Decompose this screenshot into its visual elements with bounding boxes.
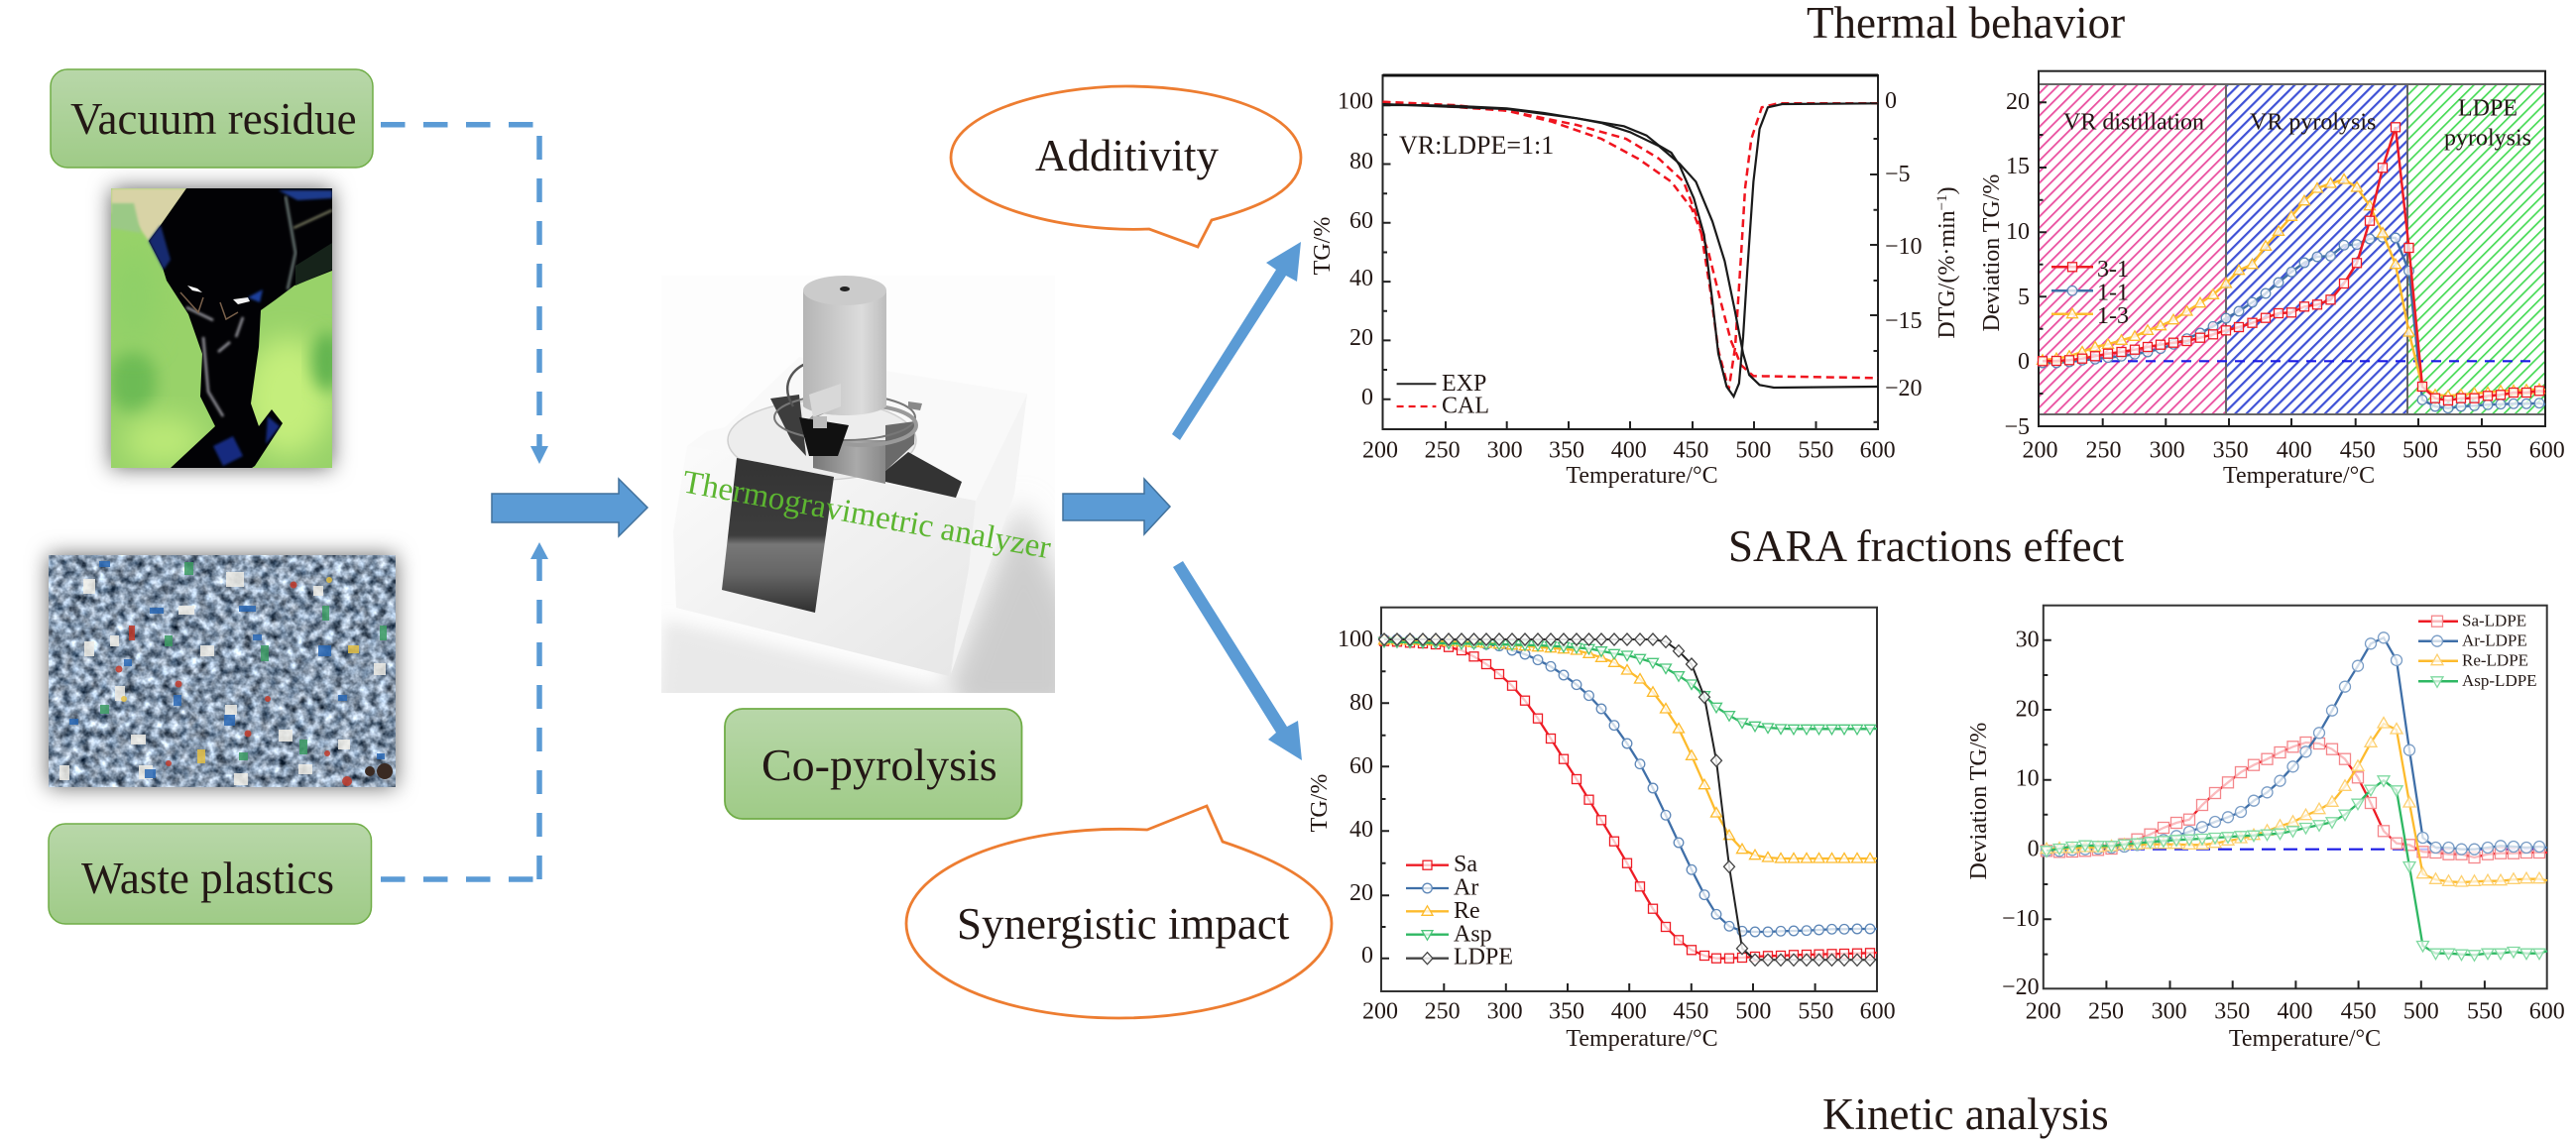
box: vacuum residue (51, 69, 373, 168)
x tick labels: 600 (2529, 438, 2565, 464)
x tick labels: 400 (2277, 999, 2312, 1025)
x tick labels: 550 (2466, 438, 2502, 464)
curve: Ar-LDPE (2047, 637, 2547, 851)
y tick labels: −20 (2002, 974, 2040, 1000)
legend: SARA fractions: LDPE (1454, 945, 1513, 971)
y tick labels: TG: 20 (1349, 325, 1373, 351)
curve: 1-3 (2043, 179, 2545, 396)
y tick labels: 0 (2018, 349, 2030, 375)
y tick labels: −10 (2002, 906, 2040, 932)
band: LDPE pyrolysis (2407, 84, 2545, 414)
y axis title: DTG: ) (1934, 186, 1960, 194)
x tick labels: 250 (2088, 999, 2124, 1025)
heading: SARA fractions effect: SARA fractions effect (1728, 521, 2125, 571)
x tick labels: 450 (2340, 438, 2376, 464)
x tick labels: 300 (2152, 999, 2187, 1025)
curve: Re (1384, 640, 1877, 858)
y tick labels: TG: 80 (1349, 149, 1373, 174)
box: waste plastics (49, 824, 371, 924)
curve: calculated DTG (1382, 102, 1878, 390)
y tick labels: 15 (2006, 154, 2030, 179)
x tick labels (1362, 999, 1896, 1025)
legend: EXP and CAL (1397, 371, 1489, 419)
y tick labels: 40 (1349, 817, 1373, 843)
y tick labels (1338, 627, 1373, 969)
legend: fraction blends: Ar-LDPE (2462, 631, 2527, 650)
legend: fraction blends (2418, 612, 2537, 690)
curve: Re-LDPE (2047, 724, 2547, 882)
label: thermogravimetric analyzer: Thermogravimetric analyzer (680, 464, 1054, 566)
y axis title: DTG: −1 (1934, 194, 1950, 210)
curve: LDPE (1384, 639, 1877, 960)
x tick labels: 250 (2086, 438, 2122, 464)
x tick labels: 400 (1611, 438, 1647, 464)
x axis title: Temperature/°C (1566, 1026, 1718, 1052)
photo: vacuum residue poured (109, 188, 343, 468)
y axis title: TG: TG/% (1310, 217, 1336, 275)
curve: Sa-LDPE (2047, 743, 2547, 857)
y tick labels: DTG: −15 (1885, 308, 1923, 334)
curve: 1-1 (2043, 237, 2545, 408)
x tick labels: 200 (2023, 438, 2058, 464)
y tick labels: TG: 0 (1361, 385, 1373, 410)
box: vacuum residue: Vacuum residue (70, 94, 357, 144)
band: VR distillation (2039, 84, 2226, 414)
y tick labels: 60 (1349, 753, 1373, 779)
y tick labels: DTG: −5 (1885, 162, 1911, 187)
x tick labels: 250 (1425, 999, 1461, 1025)
box: co-pyrolysis: Co-pyrolysis (761, 740, 997, 790)
legend: SARA fractions: Ar (1454, 875, 1478, 901)
callout: synergistic impact (906, 806, 1332, 1018)
x tick labels: 300 (1487, 999, 1523, 1025)
x tick labels: 300 (2150, 438, 2185, 464)
x tick labels: 400 (1611, 999, 1647, 1025)
chart: TG of SARA fractions and LDPE (1307, 608, 1896, 1052)
x tick labels: 550 (1798, 438, 1833, 464)
x tick labels: 600 (1860, 999, 1896, 1025)
x axis title: Temperature/°C (2229, 1026, 2381, 1052)
box: co-pyrolysis (725, 709, 1021, 819)
x tick labels: 350 (1549, 999, 1584, 1025)
arrow: analyzer to results (1063, 479, 1170, 534)
curve: Sa (1384, 641, 1877, 959)
x tick labels: 550 (1798, 999, 1833, 1025)
x axis title: Temperature/°C (2223, 463, 2375, 489)
x tick labels: 600 (1860, 438, 1896, 464)
y tick labels (2004, 89, 2030, 440)
curve: Ar (1384, 639, 1877, 932)
y axis title: Deviation TG/% (1966, 723, 1992, 879)
legend: blend ratios: 1-1 (2097, 281, 2129, 306)
y tick labels (2002, 628, 2040, 1000)
legend: SARA fractions (1406, 852, 1513, 971)
y tick labels: 10 (2006, 219, 2030, 245)
y tick labels: DTG (1885, 88, 1923, 401)
curve: Asp (1384, 641, 1877, 729)
legend: blend ratios: 1-3 (2097, 303, 2129, 329)
x tick labels: 600 (2529, 999, 2565, 1025)
dashed arrow: vacuum residue to feed (381, 125, 548, 464)
x tick labels: 200 (1362, 999, 1398, 1025)
legend: blend ratios: 3-1 (2097, 257, 2129, 283)
x tick labels: 500 (2402, 438, 2438, 464)
ratio annotation: VR:LDPE=1:1 (1399, 131, 1554, 160)
curve: Asp-LDPE (2047, 780, 2547, 955)
band label: LDPE pyrolysis: LDPE (2458, 96, 2517, 122)
x axis title: Temperature/°C (1566, 463, 1718, 489)
instrument: thermogravimetric analyzer (661, 276, 1055, 693)
legend: SARA fractions: Re (1454, 898, 1480, 924)
dashed arrow: waste plastics to feed (381, 542, 548, 879)
band label: VR distillation: VR distillation (2063, 110, 2204, 136)
y tick labels: TG: 40 (1349, 266, 1373, 291)
curve: experimental DTG (1382, 103, 1878, 397)
band label: LDPE pyrolysis: pyrolysis (2444, 126, 2531, 152)
curve: calculated TG (1382, 102, 1878, 378)
box: waste plastics: Waste plastics (81, 854, 334, 903)
x tick labels: 350 (2213, 438, 2249, 464)
y tick labels: TG (1338, 89, 1373, 410)
x tick labels: 350 (1549, 438, 1584, 464)
y tick labels: TG: 60 (1349, 208, 1373, 234)
y tick labels: 80 (1349, 690, 1373, 716)
y tick labels: DTG: −10 (1885, 234, 1923, 260)
x tick labels: 550 (2467, 999, 2503, 1025)
legend: fraction blends: Asp-LDPE (2462, 671, 2537, 690)
callout: synergistic impact: Synergistic impact (957, 899, 1290, 949)
callout: additivity: Additivity (1035, 131, 1220, 180)
legend: SARA fractions: Sa (1454, 852, 1477, 877)
y tick labels: 0 (2028, 836, 2040, 861)
x tick labels: 350 (2214, 999, 2250, 1025)
y axis title: TG/% (1307, 774, 1333, 832)
y axis title: DTG: DTG/(%·min (1934, 210, 1960, 339)
photo: waste plastic bottles (49, 555, 396, 787)
y tick labels: DTG: 0 (1885, 88, 1897, 114)
x tick labels (2026, 999, 2565, 1025)
x tick labels: 200 (2026, 999, 2061, 1025)
y tick labels: 20 (1349, 880, 1373, 906)
curve: 3-1 (2043, 127, 2545, 400)
arrow: feed into analyzer (492, 479, 647, 536)
chart: deviation TG by blend ratio (1979, 71, 2565, 489)
legend: SARA fractions: Asp (1454, 921, 1492, 947)
x tick labels: 400 (2277, 438, 2312, 464)
y tick labels: 100 (1338, 627, 1373, 652)
zero reference line (2044, 849, 2544, 851)
callout: additivity (951, 86, 1301, 247)
y tick labels: 5 (2018, 285, 2030, 310)
chart: TG and DTG, VR:LDPE 1:1 (1310, 75, 1960, 489)
y tick labels: −5 (2004, 414, 2030, 440)
y tick labels: 20 (2006, 89, 2030, 115)
y axis title: Deviation TG/% (1979, 174, 2005, 331)
zero reference line (2039, 360, 2538, 362)
y tick labels: 20 (2016, 697, 2040, 723)
legend: fraction blends: Re-LDPE (2462, 651, 2528, 670)
band label: VR pyrolysis: VR pyrolysis (2250, 110, 2376, 136)
arrow: up to thermal behavior (1172, 242, 1301, 440)
heading: kinetic analysis: Kinetic analysis (1822, 1089, 2109, 1139)
y tick labels: TG: 100 (1338, 89, 1373, 115)
y tick labels: DTG: −20 (1885, 376, 1923, 401)
x tick labels: 250 (1425, 438, 1461, 464)
curve: experimental TG (1382, 105, 1878, 388)
legend: EXP and CAL: EXP (1442, 371, 1486, 397)
y tick labels: 30 (2016, 628, 2040, 653)
x tick labels: 300 (1487, 438, 1523, 464)
x tick labels: 500 (1735, 999, 1771, 1025)
x tick labels: 450 (1673, 999, 1708, 1025)
x tick labels: 200 (1362, 438, 1398, 464)
band: VR pyrolysis (2226, 84, 2407, 414)
y tick labels: 0 (1361, 943, 1373, 969)
legend: fraction blends: Sa-LDPE (2462, 612, 2526, 630)
legend: blend ratios (2051, 257, 2129, 329)
arrow: down to SARA fractions (1173, 561, 1302, 760)
x tick labels: 450 (1673, 438, 1708, 464)
x tick labels (2023, 438, 2565, 464)
x tick labels: 500 (2403, 999, 2439, 1025)
x tick labels (1362, 438, 1896, 464)
x tick labels: 500 (1735, 438, 1771, 464)
chart: deviation TG of SARA fractions with LDPE (1966, 606, 2565, 1052)
y tick labels: 10 (2016, 766, 2040, 792)
x tick labels: 450 (2341, 999, 2377, 1025)
legend: EXP and CAL: CAL (1442, 394, 1489, 419)
